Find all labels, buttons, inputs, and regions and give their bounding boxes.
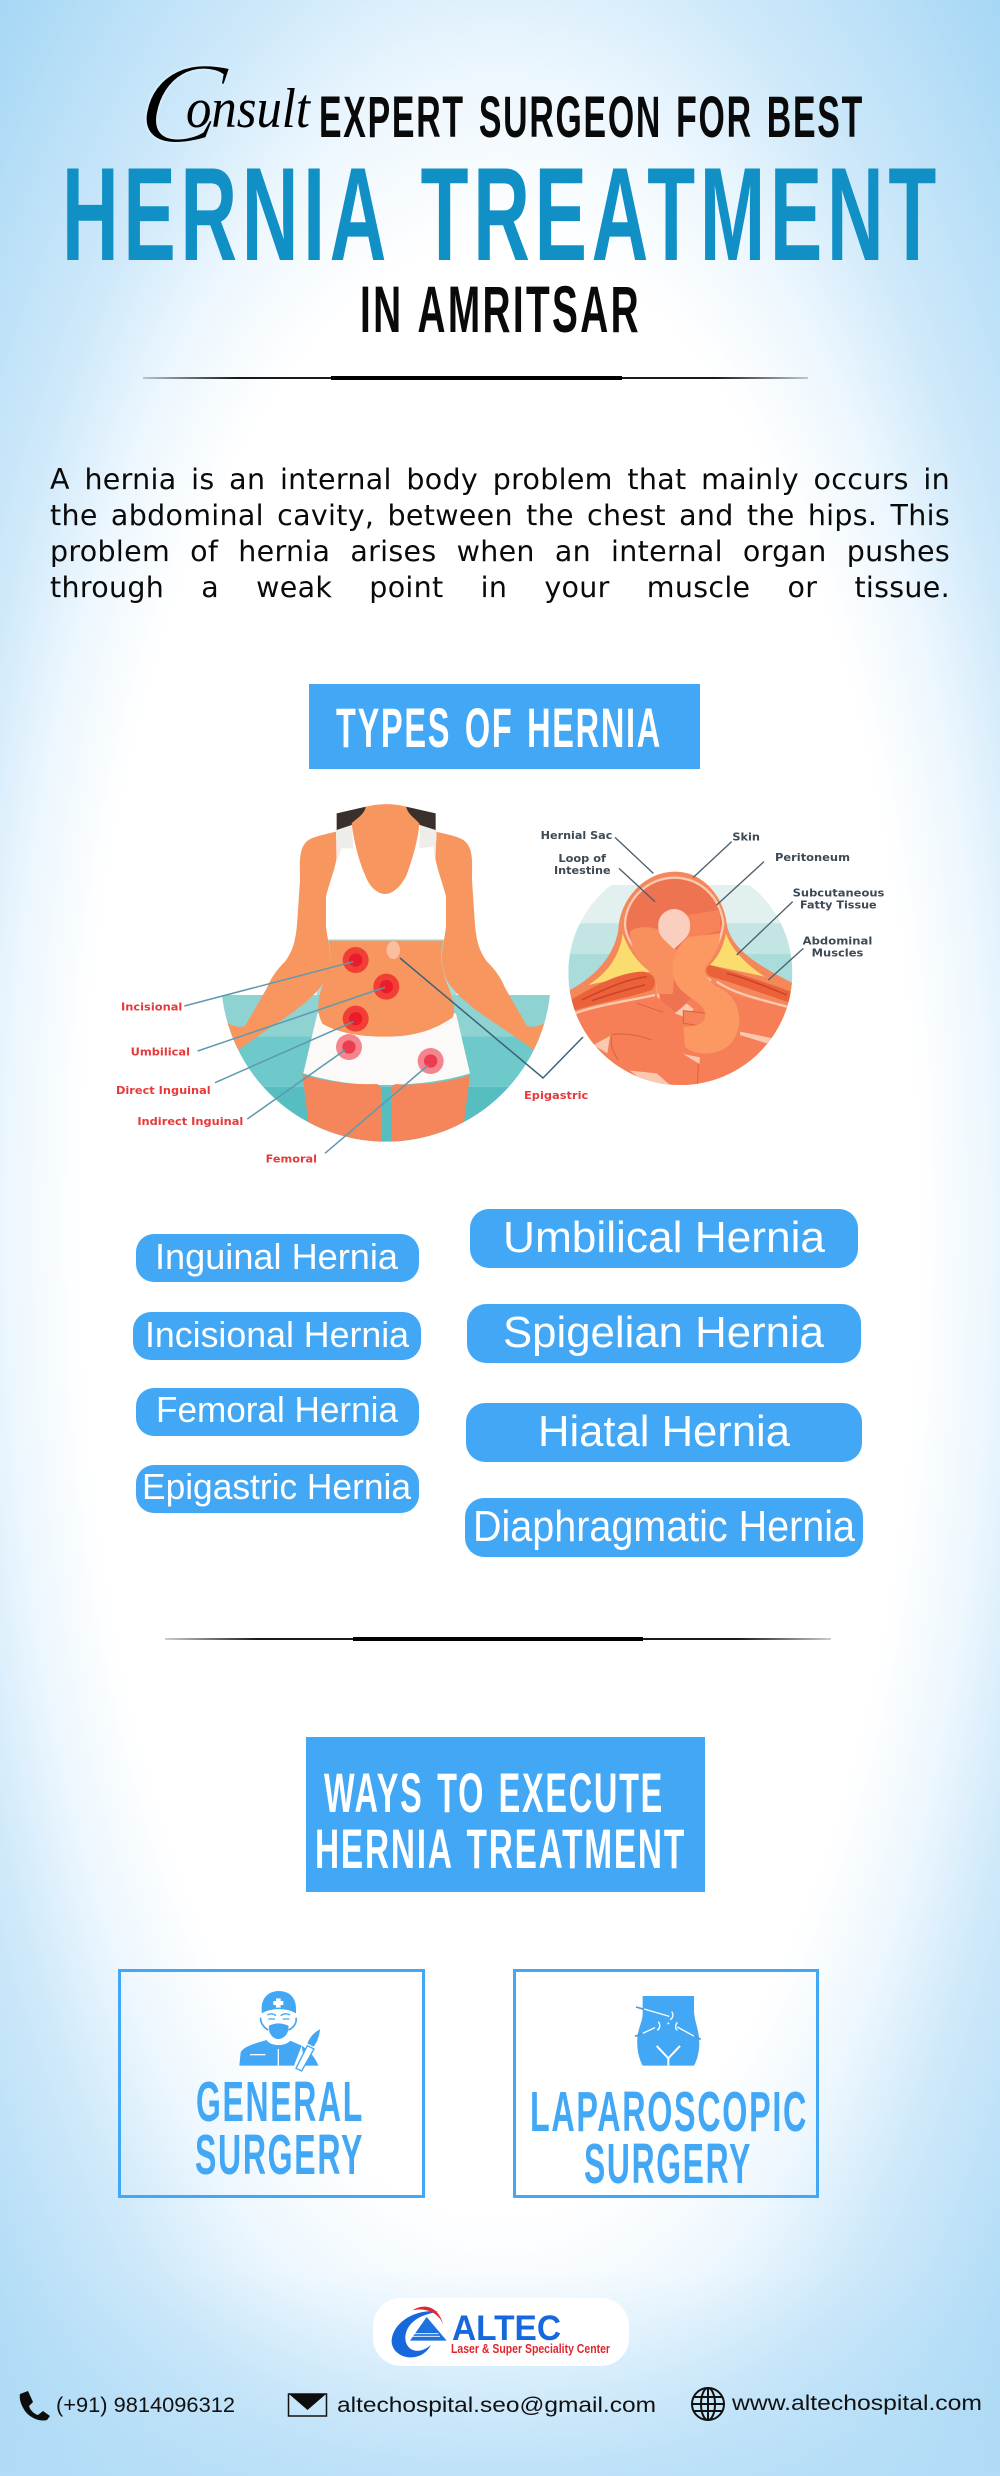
title: [62, 40, 941, 346]
contact: email: altechospital.seo@gmail.com: [337, 2394, 656, 2417]
intro paragraph: [50, 463, 950, 604]
intro paragraph: the abdominal cavity, between the chest and the hips. This: [50, 499, 950, 532]
intro paragraph: problem of hernia arises when an internal organ pushes: [50, 535, 950, 568]
hernia type pills: left column: Incisional Hernia: [145, 1314, 410, 1355]
hernia type pills: left column: Epigastric Hernia: [142, 1466, 412, 1507]
ways to execute heading: HERNIA TREATMENT: [315, 1817, 686, 1880]
script word: Consult: [129, 40, 311, 168]
hernia type pills: left column: Femoral Hernia: [156, 1389, 399, 1430]
location labels: Direct Inguinal: [116, 1084, 211, 1097]
body diagram with hernia locations: [116, 804, 557, 1166]
contact: website: [692, 2388, 982, 2420]
location labels: Umbilical: [131, 1046, 190, 1059]
pointer lines: [184, 962, 428, 1153]
contact: phone: (+91) 9814096312: [56, 2394, 235, 2417]
hernia type pills: right column: [465, 1209, 863, 1557]
hernia spots: [336, 947, 444, 1074]
cross-section labels: Fatty Tissue: [800, 899, 877, 912]
hernia type pills: right column: Diaphragmatic Hernia: [473, 1502, 855, 1551]
cross-section labels: Hernial Sac: [541, 829, 612, 842]
cross-section pointer lines: [615, 837, 803, 980]
location labels: Femoral: [266, 1153, 317, 1166]
types of hernia heading: [309, 684, 700, 769]
location labels: Indirect Inguinal: [137, 1115, 243, 1128]
hernia type pills: right column: Umbilical Hernia: [503, 1213, 826, 1262]
location labels: Incisional: [121, 1001, 182, 1014]
icon: surgeon: [239, 1991, 320, 2071]
cross-section diagram of hernia: [524, 829, 885, 1102]
cross-section labels: Subcutaneous: [793, 887, 885, 900]
hernia type pills: right column: Spigelian Hernia: [503, 1308, 825, 1357]
card: general surgery: SURGERY: [195, 2123, 364, 2187]
ways to execute heading: [306, 1737, 705, 1892]
intro paragraph: through a weak point in your muscle or tissue.: [50, 571, 950, 604]
card: laparoscopic surgery: [514, 1970, 818, 2196]
types of hernia heading: TYPES OF HERNIA: [336, 696, 662, 759]
icon: envelope: [288, 2394, 326, 2416]
card: general surgery: [120, 1970, 424, 2196]
hernia type pills: left column: [133, 1234, 421, 1513]
cross-section labels: Peritoneum: [775, 851, 850, 864]
cross-section labels: Loop of: [558, 852, 606, 865]
epigastric label: Epigastric: [524, 1089, 588, 1102]
cross-section labels: Intestine: [554, 864, 611, 877]
contact: website: www.altechospital.com: [731, 2392, 982, 2415]
hernia type pills: right column: Hiatal Hernia: [538, 1407, 791, 1456]
contact: phone: [20, 2391, 235, 2421]
label: GENERAL: [196, 2070, 364, 2134]
teal circle backdrop: [217, 832, 557, 1147]
hernia type pills: left column: Inguinal Hernia: [155, 1236, 399, 1277]
icon: globe: [692, 2388, 724, 2420]
icon: torso incisions: [635, 1996, 701, 2066]
cross-section labels: Skin: [732, 831, 760, 844]
script word: Consult: C: [129, 40, 236, 168]
script word: Consult: onsult: [186, 78, 311, 140]
icon: phone: [20, 2391, 50, 2421]
location labels: [116, 1001, 317, 1166]
logo: altec: ALTEC: [452, 2309, 561, 2348]
ways to execute heading: WAYS TO EXECUTE: [324, 1761, 664, 1824]
cross-section labels: Abdominal: [803, 935, 872, 948]
intro paragraph: A hernia is an internal body problem that mainly occurs in: [50, 463, 950, 496]
card: laparoscopic surgery: SURGERY: [584, 2132, 752, 2196]
epigastric pointer line: [400, 958, 583, 1078]
logo: altec: Laser & Super Speciality Center: [451, 2342, 610, 2356]
cross-section labels: [541, 829, 885, 960]
logo: altec: [373, 2298, 629, 2366]
heading line: in amritsar: IN AMRITSAR: [360, 272, 641, 346]
cross-section labels: Muscles: [812, 947, 864, 960]
